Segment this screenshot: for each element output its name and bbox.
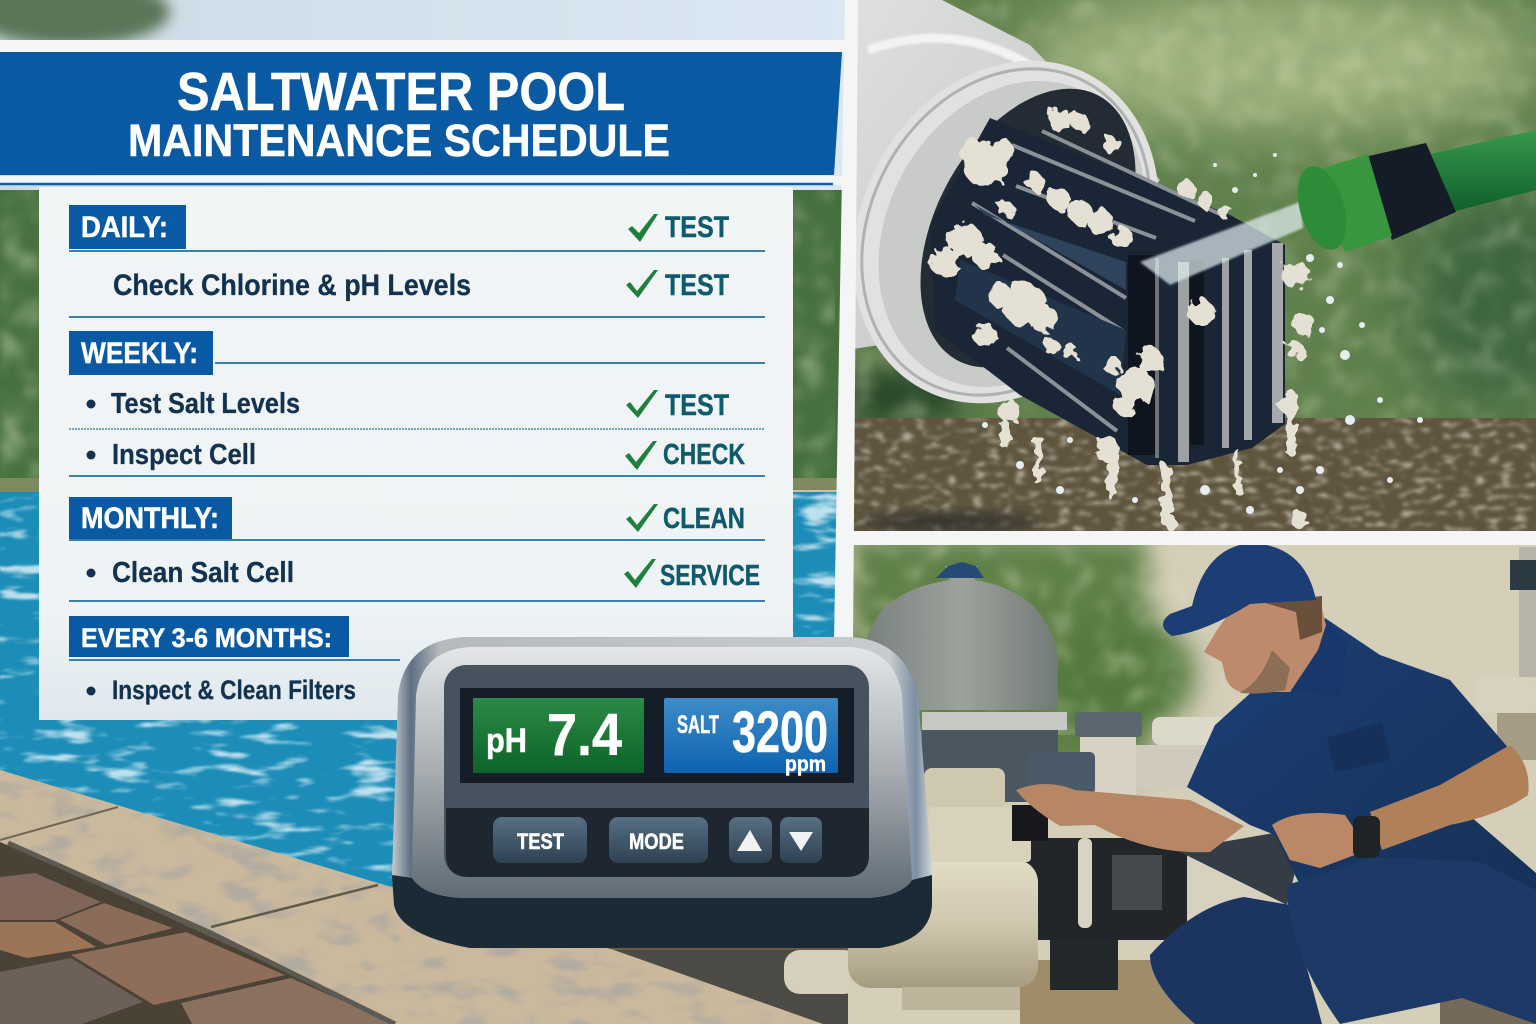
baseball cap bbox=[1163, 543, 1316, 636]
hand bbox=[1272, 813, 1354, 868]
salt deposits bbox=[930, 108, 1316, 529]
wall and bush bbox=[848, 535, 1536, 1024]
title banner bbox=[0, 52, 842, 184]
pH readout: 7.4 bbox=[547, 702, 622, 768]
section: daily: TEST bbox=[665, 269, 729, 302]
section: every 3-6 months bbox=[69, 616, 400, 705]
panel: cell cleaning photo bbox=[794, 0, 1536, 531]
control fascia bbox=[444, 665, 869, 877]
mode button: MODE bbox=[629, 829, 684, 854]
test button: TEST bbox=[517, 829, 564, 854]
plumbing bbox=[1029, 547, 1536, 795]
panel: schedule sheet bbox=[0, 52, 842, 720]
salt readout: SALT bbox=[677, 711, 719, 739]
foliage background bbox=[855, 0, 1536, 418]
section: monthly: CLEAN bbox=[663, 503, 745, 535]
section: monthly: MONTHLY: bbox=[81, 502, 219, 535]
salt readout: ppm bbox=[785, 753, 826, 776]
salt system controller bbox=[392, 637, 932, 948]
salt readout bbox=[664, 698, 838, 776]
section: daily: DAILY: bbox=[81, 211, 168, 244]
mode button bbox=[609, 817, 708, 863]
stone coping bbox=[0, 770, 830, 1024]
section: daily: TEST bbox=[665, 211, 729, 244]
pavers bbox=[0, 840, 400, 1024]
clipboard bbox=[1176, 833, 1296, 905]
section: monthly: Clean Salt Cell bbox=[112, 557, 294, 589]
left background scene bbox=[0, 0, 860, 1024]
button strip bbox=[446, 808, 869, 877]
white frame strips bbox=[0, 0, 1536, 640]
section: weekly: Test Salt Levels bbox=[111, 388, 300, 420]
neck and face bbox=[1204, 600, 1326, 693]
technician bbox=[1016, 543, 1536, 1024]
gravel ground bbox=[845, 418, 1536, 531]
controller base bbox=[392, 875, 932, 948]
title line 1: SALTWATER POOL bbox=[177, 62, 625, 122]
controller inner shell bbox=[412, 647, 912, 898]
down button bbox=[780, 817, 822, 863]
section: weekly: Inspect Cell bbox=[112, 439, 256, 471]
display screen bbox=[460, 688, 854, 783]
section: monthly bbox=[69, 497, 765, 601]
ground below controller bbox=[614, 950, 860, 1024]
section: weekly: WEEKLY: bbox=[81, 337, 198, 370]
section: monthly: SERVICE bbox=[660, 560, 760, 592]
pool water bbox=[0, 492, 860, 892]
title line 2: MAINTENANCE SCHEDULE bbox=[128, 115, 670, 166]
section: daily bbox=[69, 205, 765, 317]
pool pump bbox=[848, 768, 1187, 1010]
shirt bbox=[1187, 618, 1536, 900]
salt cell plates bbox=[930, 118, 1285, 465]
pH readout: pH bbox=[486, 722, 527, 760]
up button bbox=[729, 817, 772, 863]
section: every 3-6 months: Inspect & Clean Filters bbox=[112, 675, 356, 705]
far arm bbox=[1016, 784, 1244, 852]
near arm bbox=[1370, 745, 1529, 850]
section: daily: Check Chlorine & pH Levels bbox=[113, 269, 471, 302]
controller outer shell bbox=[392, 637, 932, 898]
section: weekly bbox=[69, 331, 765, 476]
section: weekly: TEST bbox=[665, 389, 729, 422]
garden hose and nozzle bbox=[1289, 130, 1536, 255]
shirt collar bbox=[1324, 618, 1326, 619]
section: every 3-6 months: EVERY 3-6 MONTHS: bbox=[81, 623, 332, 653]
pH readout bbox=[473, 698, 644, 773]
lower leg bbox=[1150, 897, 1322, 1024]
filter tank bbox=[865, 562, 1067, 802]
water spray and droplets bbox=[982, 153, 1423, 514]
shirt pocket bbox=[1327, 722, 1390, 772]
wrist watch bbox=[1353, 816, 1380, 858]
section: weekly: CHECK bbox=[663, 439, 745, 471]
white pipe and rim bbox=[855, 0, 1160, 404]
test button bbox=[493, 817, 587, 863]
salt readout: 3200 bbox=[732, 700, 828, 765]
panel: technician photo bbox=[848, 535, 1536, 1024]
stubble bbox=[1240, 650, 1290, 694]
thigh bbox=[1287, 857, 1536, 1024]
hair bbox=[1262, 596, 1322, 640]
